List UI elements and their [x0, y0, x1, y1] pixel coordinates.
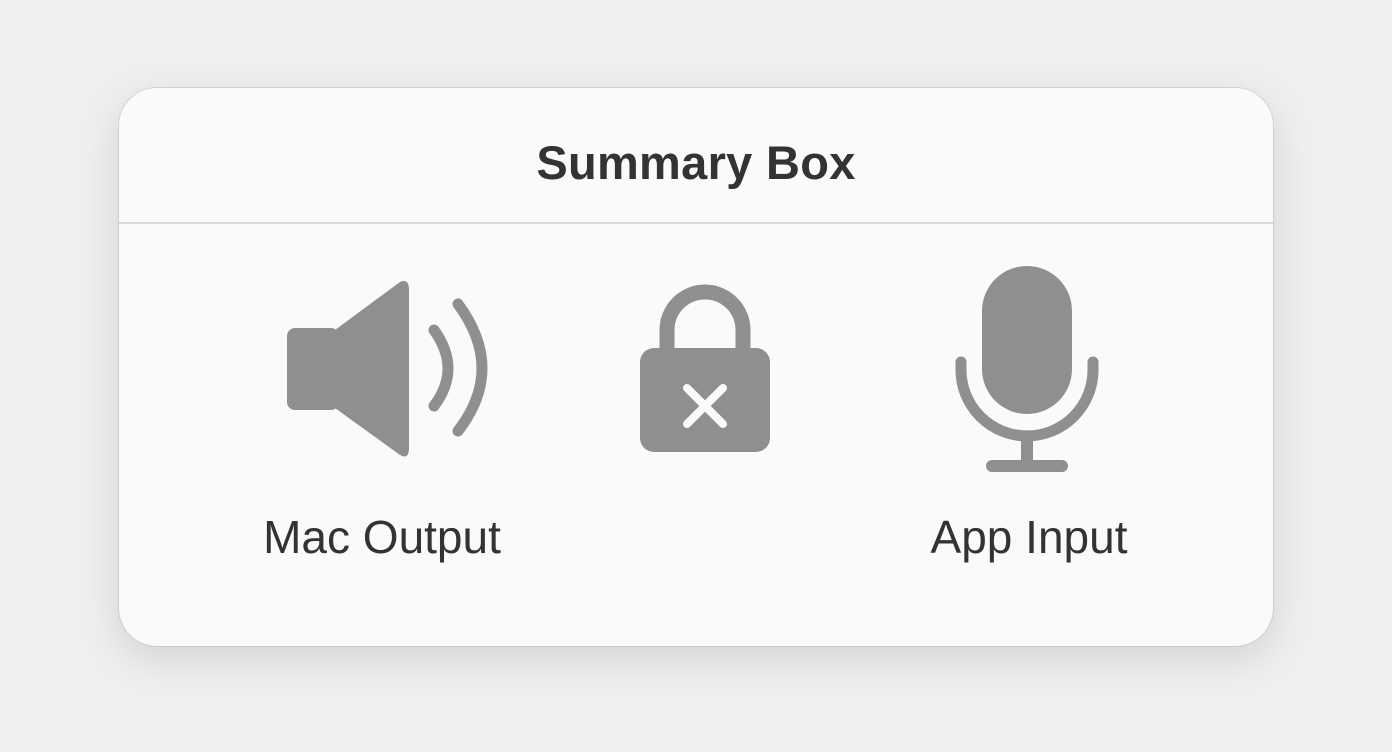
icon: microphone	[961, 266, 1093, 472]
icon: speaker	[287, 281, 482, 456]
title: Summary Box	[536, 136, 856, 189]
label: app input: App Input	[931, 511, 1127, 563]
label: mac output: Mac Output	[263, 511, 501, 563]
icon: lock with x	[640, 292, 770, 452]
panel: summary card	[119, 88, 1273, 646]
